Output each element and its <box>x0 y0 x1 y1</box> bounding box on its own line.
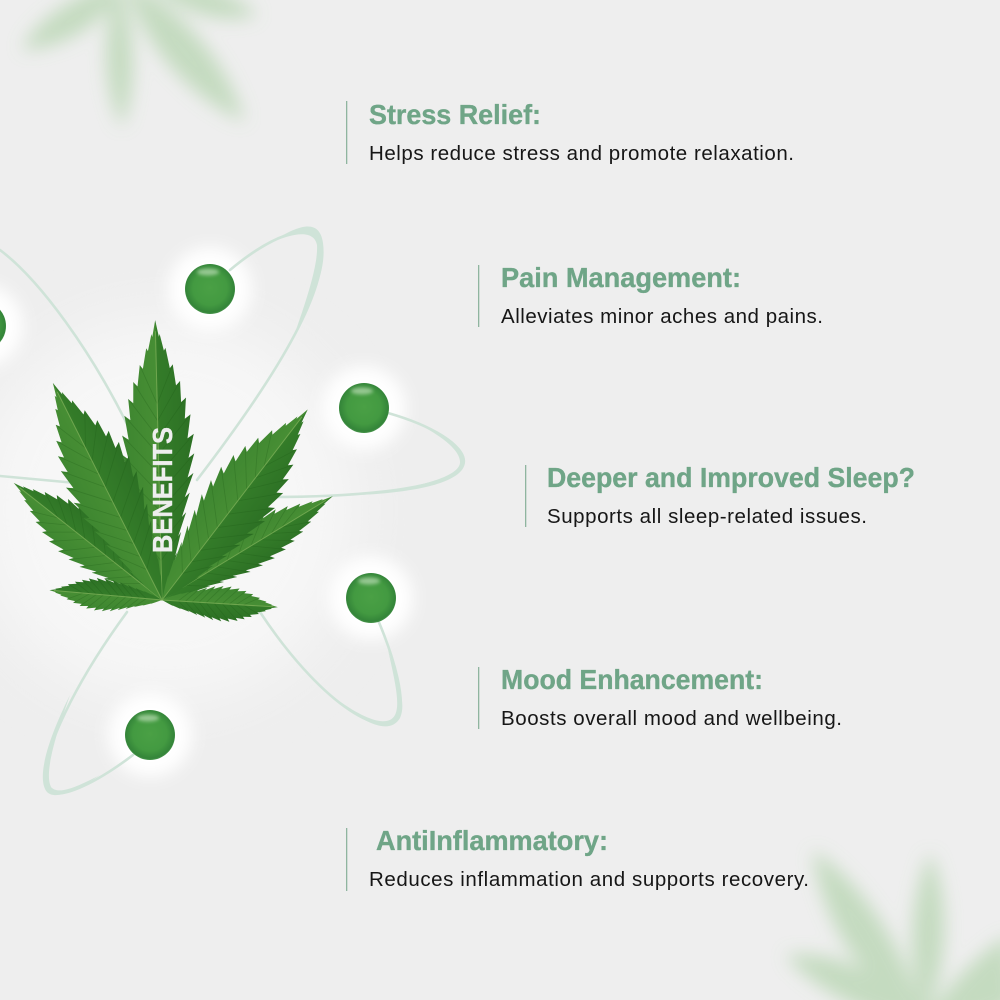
leaflet: far right <box>150 477 345 619</box>
orbit: upper left <box>0 250 130 430</box>
ball glows <box>0 247 413 777</box>
cannabis leaf <box>0 319 345 625</box>
blurred leaf: bottom right <box>785 850 1000 1000</box>
orbit bend: upper <box>270 226 324 330</box>
leaflet: lower left <box>48 574 163 616</box>
sphere 1 <box>185 264 235 314</box>
benefit: sleep: Deeper and Improved Sleep? <box>547 462 915 493</box>
central white glow <box>0 320 355 700</box>
benefit: anti-inflammatory: AntiInflammatory: <box>376 825 608 856</box>
sphere 3 <box>339 383 389 433</box>
leaflet: upper right <box>135 389 335 621</box>
orbit bend: lower right <box>335 650 402 726</box>
benefit: stress relief <box>346 99 794 165</box>
leaflet: top <box>119 319 198 601</box>
sphere 4 <box>346 573 396 623</box>
orbit: lower left <box>45 612 133 793</box>
benefit: pain management <box>478 262 823 328</box>
green spheres <box>0 264 396 760</box>
blurred leaf: top left <box>22 0 258 128</box>
sphere 5 <box>125 710 175 760</box>
benefit: pain management: Alleviates minor aches and pains. <box>501 305 823 328</box>
orbit: left stub <box>0 476 76 483</box>
orbit rings <box>0 226 465 795</box>
benefit: stress relief: Helps reduce stress and promote relaxation. <box>369 142 794 165</box>
sphere 2 <box>0 301 6 351</box>
benefit: mood enhancement: Boosts overall mood and wellbeing. <box>501 707 842 730</box>
orbit bend: lower left <box>43 695 100 795</box>
benefit: anti-inflammatory <box>346 825 809 891</box>
benefit: mood enhancement: Mood Enhancement: <box>501 664 763 695</box>
leaflet: upper left <box>21 367 193 616</box>
orbit: right <box>270 413 463 497</box>
benefit: anti-inflammatory: Reduces inflammation and supports recovery. <box>369 868 809 891</box>
orbit bend: right <box>360 425 465 495</box>
benefit: stress relief: Stress Relief: <box>369 99 541 130</box>
benefit: pain management: Pain Management: <box>501 262 741 293</box>
leaflet: far left <box>0 462 178 620</box>
benefit: sleep: Supports all sleep-related issues. <box>547 505 867 528</box>
orbit: upper <box>197 232 322 480</box>
vertical label: BENEFITS: BENEFITS <box>147 427 178 553</box>
leaflet: lower right <box>161 582 279 625</box>
benefit: mood enhancement <box>478 664 842 730</box>
orbit: lower right <box>260 612 401 724</box>
benefit: sleep <box>525 462 915 528</box>
